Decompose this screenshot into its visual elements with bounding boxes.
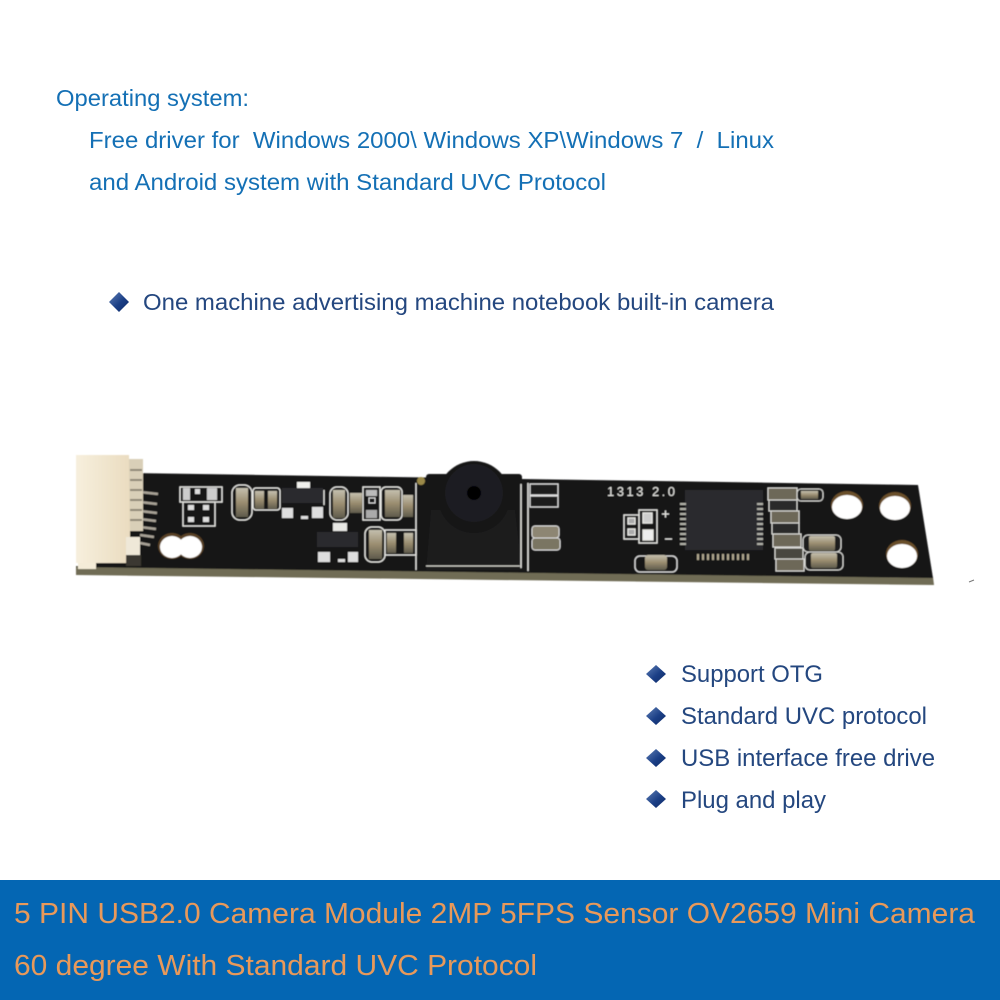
text block: operating system: Free driver for Windows 2000\ Windows XP\Windows 7 / Linux xyxy=(89,127,774,153)
silkscreen parts middle xyxy=(528,483,560,571)
polarity marks xyxy=(624,510,672,543)
small components left xyxy=(183,482,413,562)
title banner: 5 PIN USB2.0 Camera Module 2MP 5FPS Sensor OV2659 Mini Camera xyxy=(14,898,976,930)
text block: operating system: and Android system with Standard UVC Protocol xyxy=(89,169,606,195)
components right xyxy=(768,488,843,571)
feature: support OTG: Support OTG xyxy=(681,661,823,688)
text block: operating system xyxy=(56,85,774,195)
camera lens module xyxy=(417,461,522,570)
camera module photo xyxy=(76,455,934,585)
feature: UVC protocol: Standard UVC protocol xyxy=(681,703,927,730)
main chip xyxy=(680,490,763,560)
text block: operating system: Operating system: xyxy=(56,85,249,111)
board label: 1313 2.0 xyxy=(607,484,675,499)
feature bullet: application: One machine advertising machine notebook built-in camera xyxy=(143,289,775,315)
feature list xyxy=(646,661,935,814)
circuit board xyxy=(76,473,934,585)
feature: USB interface: USB interface free drive xyxy=(681,745,935,772)
white connector xyxy=(76,455,143,569)
title banner xyxy=(0,880,1000,1000)
capacitor bottom xyxy=(635,555,677,572)
feature: plug and play: Plug and play xyxy=(681,787,826,814)
mounting slot xyxy=(158,533,204,559)
title banner: 60 degree With Standard UVC Protocol xyxy=(14,950,537,982)
mounting holes xyxy=(831,491,918,568)
silkscreen parts left xyxy=(180,483,416,570)
small mark xyxy=(969,580,974,582)
connector pins xyxy=(140,492,158,545)
